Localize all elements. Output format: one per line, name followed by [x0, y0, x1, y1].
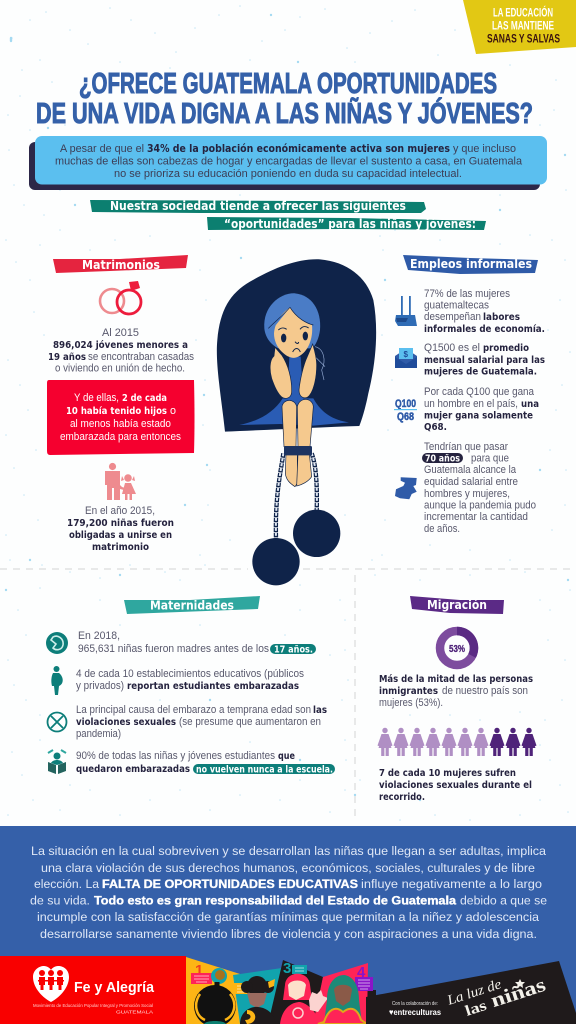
intro panel [29, 136, 547, 190]
callout: 2 of 10: Y de ellas, [74, 392, 119, 404]
panel: conclusion band: Todo esto es gran responsabilidad del Estado de Guatemala [94, 894, 456, 908]
text: sexual violence: violaciones sexuales [76, 717, 176, 728]
intro panel: 34% de la población económicamente activa son mujeres [147, 143, 450, 155]
chains [276, 453, 317, 538]
panel: conclusion band: FALTA DE OPORTUNIDADES EDUCATIVAS [102, 877, 358, 891]
icon: baby in womb [46, 632, 68, 654]
intro panel: no se prioriza su educación poniendo en duda su capacidad intelectual. [114, 168, 462, 180]
chart: 7 of 10 women pictogram [378, 728, 536, 756]
panel: conclusion band: una clara violación de sus derechos humanos, económicos, sociales, culturales y de libre [41, 861, 535, 875]
logo panel: Fe y Alegría [0, 956, 186, 1024]
text: 70 years: aunque la pandemia pudo [424, 500, 536, 512]
text: schools report [76, 668, 304, 693]
text: 70 years: equidad salarial entre [424, 476, 518, 488]
illustration: four girls: 1 [195, 962, 203, 979]
text: Q100 gap: una [521, 399, 539, 410]
text: Q1500: mensual salarial para las [424, 355, 545, 366]
panel: conclusion band: influye negativamente a lo largo [361, 877, 542, 891]
text: 70 years: de años. [424, 523, 460, 535]
text: Q1500 [424, 338, 545, 378]
text: 7 of 10 women [379, 768, 532, 803]
text: 90% do not return: no vuelven nunca a la escuela. [196, 764, 333, 776]
illustration: four girls [186, 957, 376, 1024]
text: sexual violence: (se presume que aumentaron en [179, 716, 321, 728]
heading: empleos informales: Empleos informales [410, 257, 532, 271]
title [36, 68, 533, 130]
text: 965,631 girls [78, 630, 316, 656]
text: 77%: guatemaltecas [424, 300, 489, 312]
icon: broom [395, 296, 417, 326]
callout: 2 of 10: embarazada para entonces [60, 431, 181, 443]
text: more than half: inmigrantes [379, 686, 438, 697]
text: 70 years: para que [471, 452, 509, 464]
text: married youth: 896,024 jóvenes menores a [53, 339, 188, 351]
text: more than half [379, 673, 533, 709]
panel: conclusion band: de su vida. [30, 894, 90, 908]
panel: conclusion band: elección. La [34, 877, 99, 891]
icon: crossed circle [48, 712, 66, 732]
text: married youth: Al 2015 [102, 327, 139, 339]
text: sexual violence: La principal causa del embarazo a temprana edad son [76, 704, 311, 716]
text: Q1500: Q1500 es el [424, 342, 480, 354]
callout: 2 of 10: o [170, 405, 176, 417]
illustration: four girls: 2 [235, 975, 243, 992]
icon: wedding rings [100, 281, 141, 314]
text: sexual violence: pandemia) [76, 728, 121, 740]
text: married youth: 19 años [48, 352, 86, 363]
icon: salary envelope [395, 348, 417, 368]
subheading: “oportunidades” para las niñas y jóvenes: [224, 217, 476, 231]
skirt [239, 398, 349, 426]
illustration: four girls: 4 [357, 964, 366, 981]
icon: adult and girl [105, 463, 136, 500]
text: 77%: labores [483, 312, 520, 323]
callout: 2 of 10: al menos había estado [70, 418, 171, 430]
text: Q100 gap: Por cada Q100 que gana [424, 386, 534, 398]
text: married youth: se encontraban casadas [88, 351, 194, 363]
text: schools report: y privados) [76, 680, 124, 692]
text: 70 years: incrementar la cantidad [424, 511, 528, 523]
heading: migración: Migración [427, 598, 487, 612]
arms [270, 347, 292, 398]
logo panel: Fe y Alegría: Fe y Alegría [74, 979, 155, 996]
text: Q100 gap: mujer gana solamente [424, 410, 533, 422]
panel: migración [378, 596, 536, 803]
text: sexual violence [76, 700, 327, 740]
chart: 53% donut: 53% [449, 643, 466, 655]
heading: migración [410, 596, 504, 614]
panel: matrimonios [47, 255, 194, 553]
panel: conclusion band: desarrollarse sanamente viviendo libres de violencia y con aspiraciones a una vida digna. [40, 927, 537, 941]
panel: empleos informales [394, 255, 545, 535]
text: 77% [424, 288, 545, 335]
text: Q100 gap [424, 386, 539, 433]
icon: Q100 versus Q68: Q100 [395, 398, 416, 410]
panel: La luz de las niñas [366, 961, 576, 1024]
text: 77%: informales de economía. [424, 323, 545, 335]
hair [264, 293, 320, 348]
text: 179,200 girls: obligadas a unirse en [69, 530, 172, 541]
intro panel: y que incluso [453, 143, 516, 155]
text: 90% do not return: 90% de todas las niñas y jóvenes estudiantes [76, 750, 275, 762]
text: Q1500: mujeres de Guatemala. [424, 366, 537, 378]
face [274, 307, 312, 358]
legs [282, 400, 297, 447]
text: 70 years [422, 441, 536, 535]
heading: maternidades: Maternidades [150, 598, 234, 612]
callout: 2 of 10: 10 había tenido hijos [66, 405, 167, 417]
icon: pregnant woman [51, 666, 63, 695]
text: more than half: mujeres (53%). [379, 697, 443, 709]
text: 179,200 girls: En el año 2015, [85, 505, 155, 517]
text: 179,200 girls: 179,200 niñas fueron [67, 518, 174, 529]
panel: maternidades [46, 596, 335, 776]
text: 179,200 girls: matrimonio [92, 542, 149, 553]
corner ribbon: education tagline [463, 0, 576, 54]
panel: La luz de las niñas: La luz de [445, 977, 503, 1009]
text: 70 years: Guatemala alcance la [424, 464, 516, 476]
text: sexual violence: las [313, 705, 327, 716]
callout: 2 of 10: 2 de cada [122, 393, 167, 404]
icon: salary envelope: $ [404, 350, 408, 359]
illustration: four girls: 3 [283, 960, 291, 977]
chart: 53% donut [440, 631, 474, 665]
text: Q100 gap: un hombre en el país, [424, 398, 518, 410]
logo panel: Fe y Alegría: GUATEMALA [116, 1010, 153, 1014]
subheading: Nuestra sociedad tiende a ofrecer las siguientes [110, 199, 406, 213]
panel: conclusion band [0, 826, 576, 1024]
intro panel: muchas de ellas son cabezas de hogar y encargadas de llevar el sustento a casa, en Guatemala [55, 156, 523, 168]
panel: conclusion band: La situación en la cual sobreviven y se desarrollan las niñas que llegan a ser adultas, implica [31, 844, 546, 858]
heading: empleos informales [403, 255, 538, 274]
text: 965,631 girls: 965,631 niñas fueron madres antes de los [78, 643, 269, 655]
icon: Q100 versus Q68 [394, 398, 417, 423]
icon: heart with children [33, 966, 69, 1002]
illustration: chained girl [217, 259, 376, 585]
text: 90% do not return: quedaron embarazadas [76, 764, 190, 775]
heading: maternidades [124, 596, 260, 614]
text: 7 of 10 women: violaciones sexuales durante el [379, 780, 532, 791]
text: 70 years: Tendrían que pasar [424, 441, 508, 453]
text: Q1500: promedio [483, 343, 529, 354]
heading: matrimonios: Matrimonios [82, 258, 160, 272]
intro panel: A pesar de que el [60, 143, 144, 155]
text: more than half: Más de la mitad de las personas [379, 673, 533, 685]
icon: Guatemala map [395, 477, 417, 499]
text: 77%: 77% de las mujeres [424, 288, 510, 300]
text: more than half: de nuestro país son [442, 685, 528, 697]
text: 965,631 girls: En 2018, [78, 630, 120, 642]
text: 7 of 10 women: recorrido. [379, 792, 425, 803]
panel: conclusion band: incumple con la satisfacción de garantías mínimas que permitan a la niñez y adolescencia [37, 910, 539, 924]
text: 965,631 girls: 17 años. [274, 644, 313, 656]
panel: La luz de las niñas: Con la colaboración de: [392, 1001, 438, 1007]
callout: 2 of 10 [47, 380, 194, 455]
panel: La luz de las niñas: ♥entreculturas [389, 1007, 441, 1017]
torso [287, 357, 303, 401]
text: schools report: reportan estudiantes embarazadas [127, 681, 299, 692]
text: Q100 gap: Q68. [424, 422, 447, 433]
heading: matrimonios [53, 255, 188, 273]
text: 90% do not return: que [278, 751, 295, 762]
text: 179,200 girls [67, 505, 174, 553]
text: 70 years: hombres y mujeres, [424, 488, 510, 500]
logo panel: Fe y Alegría: Movimiento de Educación Popular Integral y Promoción Social [33, 1003, 153, 1008]
icon: Q100 versus Q68: Q68 [397, 411, 414, 423]
text: married youth [48, 327, 194, 374]
text: married youth: o viviendo en unión de hecho. [55, 362, 185, 374]
text: schools report: 4 de cada 10 establecimientos educativos (públicos [76, 668, 304, 680]
panel: La luz de las niñas: las niñas [462, 974, 549, 1021]
icon: girl reading [48, 750, 66, 774]
subheading [90, 199, 486, 231]
text: 7 of 10 women: 7 de cada 10 mujeres sufren [379, 768, 516, 779]
panel: conclusion band: debido a que se [460, 894, 547, 908]
text: 90% do not return [76, 746, 335, 776]
text: 70 years: 70 años [425, 454, 460, 464]
text: 77%: desempeñan [424, 311, 481, 323]
